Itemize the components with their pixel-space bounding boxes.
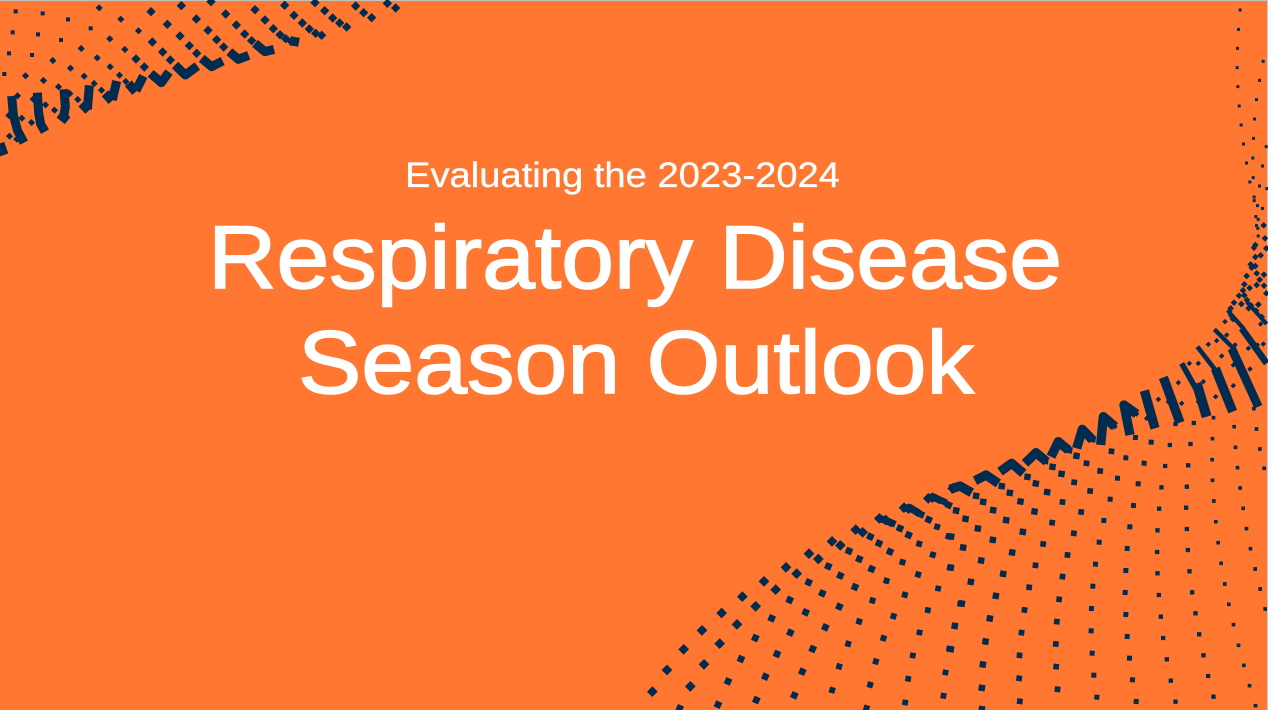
subtitle: Evaluating the 2023-2024 bbox=[405, 156, 840, 195]
dot wave: top left bbox=[0, 0, 398, 155]
title: Season Outlook bbox=[298, 312, 975, 412]
title: Respiratory Disease bbox=[208, 207, 1062, 307]
dot wave: top right edge bbox=[1228, 10, 1268, 321]
dot wave: bottom right bbox=[948, 301, 1267, 710]
dot wave: bottom centre bbox=[650, 486, 963, 710]
title bbox=[208, 207, 1062, 412]
